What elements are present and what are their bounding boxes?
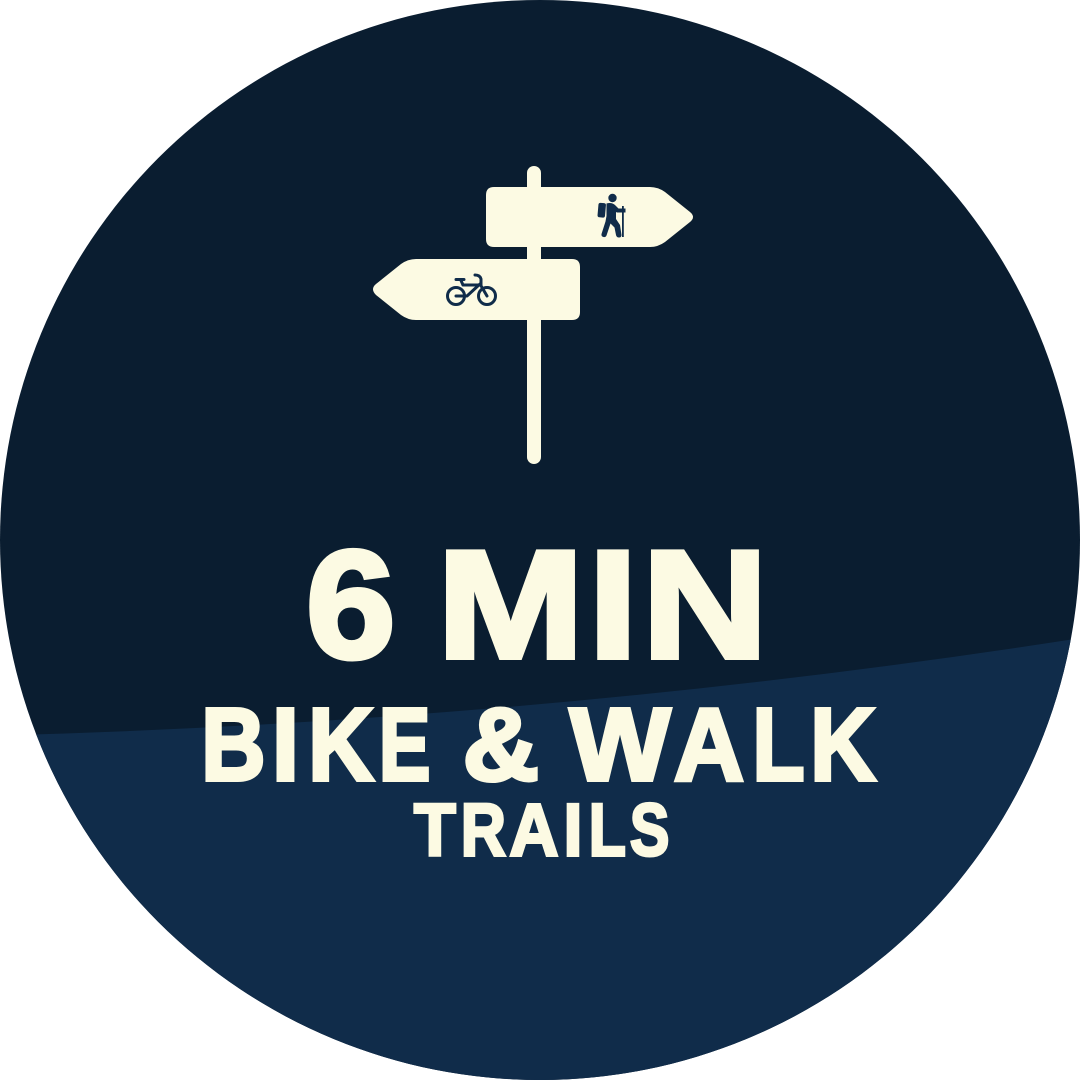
subtitle: BIKE & WALK [201, 687, 876, 803]
subtitle: BIKE & WALK: I [272, 688, 299, 803]
subtitle: BIKE & WALK: W [570, 688, 670, 803]
subtitle: TRAILS: T [414, 790, 456, 872]
subtitle: BIKE & WALK: K [810, 687, 876, 802]
title: 6 MIN: 6 [306, 520, 395, 691]
icon: signpost [373, 166, 693, 464]
icon: hiker [597, 194, 626, 238]
subtitle: BIKE & WALK: B [201, 688, 266, 802]
subtitle: TRAILS: L [589, 790, 626, 872]
sign: hiking, pointing right [486, 187, 693, 247]
subtitle: TRAILS: I [564, 790, 582, 872]
subtitle: BIKE & WALK: K [308, 687, 374, 802]
subtitle: BIKE & WALK: L [752, 689, 805, 803]
title: 6 MIN: I [588, 519, 638, 691]
title: 6 MIN: M [437, 519, 584, 691]
sign: biking, pointing left [373, 259, 580, 320]
subtitle: TRAILS: S [630, 789, 669, 872]
subtitle: TRAILS: A [509, 790, 559, 872]
subtitle: BIKE & WALK: A [674, 687, 744, 803]
subtitle: TRAILS [414, 789, 669, 872]
subtitle: BIKE & WALK: & [463, 688, 539, 803]
icon: bicycle [448, 275, 496, 304]
subtitle: BIKE & WALK: E [379, 688, 430, 803]
subtitle: TRAILS: R [461, 790, 506, 872]
title: 6 MIN: N [642, 519, 768, 690]
signpost pole [527, 166, 541, 464]
title: 6 MIN [306, 519, 768, 691]
